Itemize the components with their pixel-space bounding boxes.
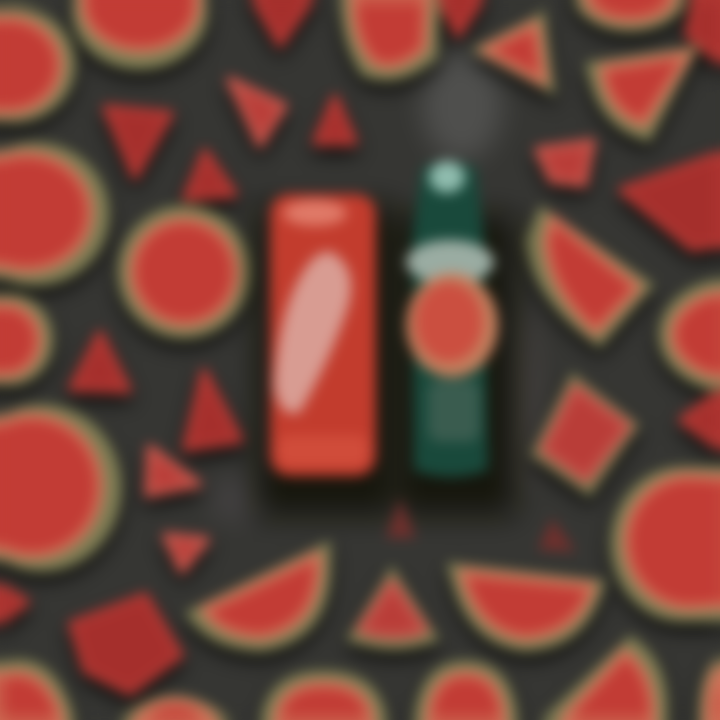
slice: large lower left round <box>0 404 122 572</box>
slice: lower right round <box>610 466 720 622</box>
slice: right wedge with rim <box>525 205 655 348</box>
slice: bottom left corner <box>0 659 76 720</box>
wedge: left small <box>72 334 128 390</box>
bottle pale band <box>406 240 494 284</box>
wedge: upper small <box>316 98 354 142</box>
lighter table patches <box>209 50 537 522</box>
wedge: top row <box>106 108 170 176</box>
small wedge below bottle <box>538 518 576 552</box>
slice: left edge round <box>0 294 54 386</box>
wedge: lower left <box>148 448 198 494</box>
wedge: bottom centre <box>346 565 440 650</box>
wedge: right small <box>538 142 592 184</box>
green bottle <box>406 161 498 477</box>
can lower band <box>278 435 368 467</box>
wedge: right large <box>622 154 720 248</box>
can top highlight <box>283 200 347 226</box>
wedge: upper <box>230 80 284 144</box>
slice: right rectangle <box>530 372 640 497</box>
slice: upper right <box>585 45 700 142</box>
wedge: left mid <box>186 372 240 448</box>
slice: top left round <box>0 7 76 123</box>
wedge: top centre <box>252 0 314 44</box>
slice: bottom edge centre <box>260 670 388 720</box>
slice: bottom edge right <box>413 660 519 720</box>
wedge: lower left edge <box>0 586 26 622</box>
wedge: upper left small <box>186 152 234 198</box>
slice: bottom edge left <box>118 695 232 720</box>
wedge: bottom left large <box>72 596 180 692</box>
bottle lower panel <box>428 380 480 442</box>
small wedge below drinks <box>386 498 416 538</box>
drink shadows <box>258 205 514 515</box>
slice: top centre rim <box>340 0 440 81</box>
bottle watermelon label <box>406 273 498 377</box>
slice: top right wedge <box>470 10 556 96</box>
slice: full round centre left <box>117 205 251 339</box>
slice: large upper left round <box>0 142 110 286</box>
wedge: lower left small <box>166 536 206 570</box>
red can <box>270 194 376 476</box>
wedge: top middle <box>438 0 484 34</box>
slice: bottom right corner <box>698 655 720 720</box>
slice: bottom right wedge <box>540 635 668 720</box>
slice: bottom half left <box>185 540 332 652</box>
bottle cap highlight <box>429 161 465 193</box>
slice: top half <box>72 0 208 70</box>
can swoosh graphic <box>274 252 351 413</box>
slice: bottom half right <box>447 562 606 652</box>
wedge: right edge small <box>682 392 720 448</box>
slice: top right half <box>572 0 688 32</box>
wedge: far top right <box>688 0 720 62</box>
slice: right edge round <box>658 278 720 392</box>
